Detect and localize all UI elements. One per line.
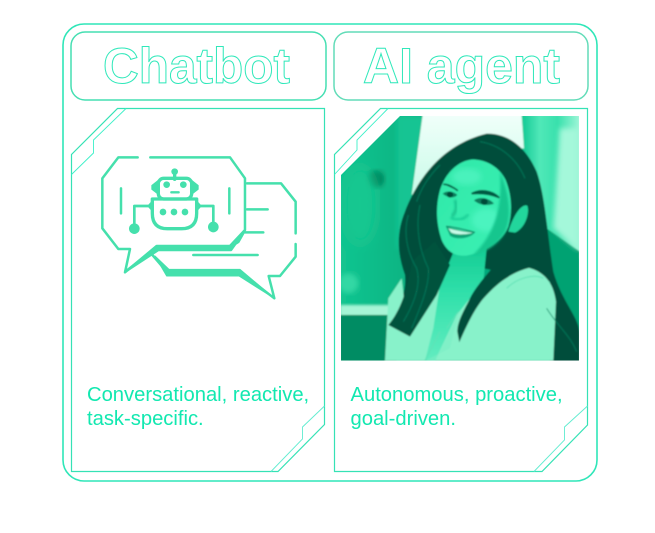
hair, back [388, 134, 580, 363]
shirt details [438, 276, 544, 336]
photo: smiling woman in duotone green [338, 115, 582, 363]
text: chatbot description: Conversational, reactive, [87, 384, 309, 406]
panel frame with cut corners [334, 108, 588, 472]
text: AI agent description: Autonomous, proactive, [350, 384, 563, 406]
text: AI agent description: goal-driven. [350, 408, 456, 430]
panel: chatbot [72, 108, 324, 472]
message lines [121, 188, 268, 255]
eyes [443, 192, 494, 205]
ear [508, 205, 528, 233]
panel frame with cut corners [72, 108, 324, 472]
mouth [446, 226, 475, 238]
robot [129, 168, 219, 234]
panel: AI agent [334, 108, 588, 472]
text: chatbot description: task-specific. [87, 408, 204, 430]
back speech bubble [152, 183, 296, 298]
eyebrows [444, 184, 499, 198]
shirt [385, 268, 556, 361]
header: AI agent: AI agent [363, 38, 560, 94]
header: Chatbot: Chatbot [103, 38, 290, 94]
icon: chatbot speech bubbles with robot [102, 157, 296, 298]
photo background [338, 115, 582, 363]
hair strands [403, 142, 577, 352]
neck and chest [425, 248, 487, 361]
outer frame [63, 24, 597, 481]
face highlights and shadows [451, 168, 509, 255]
hair, front lock [456, 266, 530, 342]
front speech bubble [102, 157, 245, 272]
face [437, 159, 511, 256]
header: AI agent [334, 32, 588, 100]
header: Chatbot [71, 32, 326, 100]
